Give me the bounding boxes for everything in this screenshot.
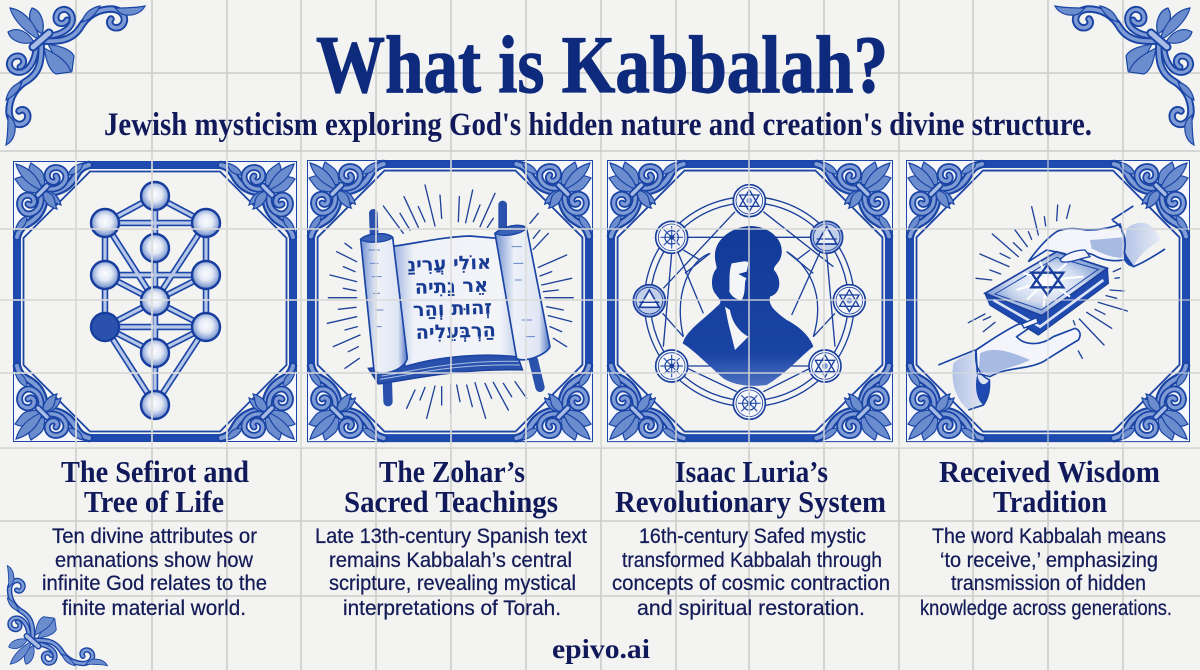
body text 2 xyxy=(315,524,587,620)
body text 4: The word Kabbalah means xyxy=(932,524,1166,548)
book xyxy=(985,268,1108,335)
heading 4 xyxy=(939,454,1160,519)
Luria silhouette xyxy=(683,226,813,386)
fingers over book xyxy=(1060,250,1090,262)
body text 1: infinite God relates to the xyxy=(42,571,267,595)
body text 1: Ten divine attributes or xyxy=(52,524,257,548)
body text 2: Late 13th-century Spanish text xyxy=(315,524,587,548)
heading 2: The Zohar’s xyxy=(379,454,525,489)
body text 3: and spiritual restoration. xyxy=(637,596,865,620)
body text 3 xyxy=(612,524,890,620)
tile frame 3 xyxy=(608,161,892,441)
panel: The Sefirot and Tree of Life xyxy=(12,160,1187,616)
Hebrew text on scroll: אֵר נַתִיה xyxy=(414,273,489,299)
body text 2: scripture, revealing mystical xyxy=(329,571,576,595)
body text 3: concepts of cosmic contraction xyxy=(612,571,890,595)
heading 4: Received Wisdom xyxy=(939,454,1160,489)
lower hand xyxy=(952,350,989,410)
ornament: top-right corner xyxy=(1055,6,1194,145)
body text 4 xyxy=(920,524,1172,620)
heading 1 xyxy=(61,454,249,519)
panel: The Zohar's Sacred Teachings xyxy=(13,160,1187,620)
heading 3: Isaac Luria’s xyxy=(675,454,828,489)
ornament: bottom-left corner xyxy=(7,566,107,666)
title: What is Kabbalah? xyxy=(316,19,888,110)
heading 2: Sacred Teachings xyxy=(344,484,558,519)
heading 1: Tree of Life xyxy=(84,484,224,519)
Hebrew text on scroll: זְהוּת וְהַר xyxy=(412,296,492,321)
icon: hands passing a book with star xyxy=(938,205,1165,410)
body text 2: interpretations of Torah. xyxy=(343,596,561,620)
upper hand xyxy=(1028,224,1130,262)
panel: Isaac Luria's Revolutionary System xyxy=(13,160,1187,620)
Hebrew text on scroll: הַרְבְּעֵלִיה xyxy=(415,318,496,344)
body text 4: ‘to receive,’ emphasizing xyxy=(940,548,1158,572)
body text 2: remains Kabbalah’s central xyxy=(329,548,572,572)
Hebrew text on scroll: אוֹלִי עֲרִינַ xyxy=(407,251,491,276)
tile frame 1 xyxy=(14,162,296,441)
panel: Received Wisdom Tradition xyxy=(13,160,1190,620)
tile frame 4 xyxy=(907,161,1189,441)
body text 3: 16th-century Safed mystic xyxy=(639,524,866,548)
icon: tree of life diagram xyxy=(91,182,220,419)
ornament: top-left corner xyxy=(6,6,145,145)
body text 3: transformed Kabbalah through xyxy=(622,548,882,572)
body text 1: finite material world. xyxy=(62,596,246,620)
body text 1 xyxy=(42,524,267,620)
heading 1: The Sefirot and xyxy=(61,454,249,489)
body text 1: emanations show how xyxy=(55,548,253,572)
icon: Isaac Luria portrait in medallion ring xyxy=(633,185,865,419)
brand footer: epivo.ai xyxy=(552,634,651,664)
body text 4: transmission of hidden xyxy=(951,571,1146,595)
heading 3 xyxy=(615,454,886,519)
tile frame 2 xyxy=(308,161,592,441)
icon: Zohar scroll with rays xyxy=(327,185,573,418)
heading 2 xyxy=(344,454,558,519)
heading 4: Tradition xyxy=(993,484,1107,519)
Hebrew text on scroll xyxy=(407,251,496,344)
heading 3: Revolutionary System xyxy=(615,484,886,519)
